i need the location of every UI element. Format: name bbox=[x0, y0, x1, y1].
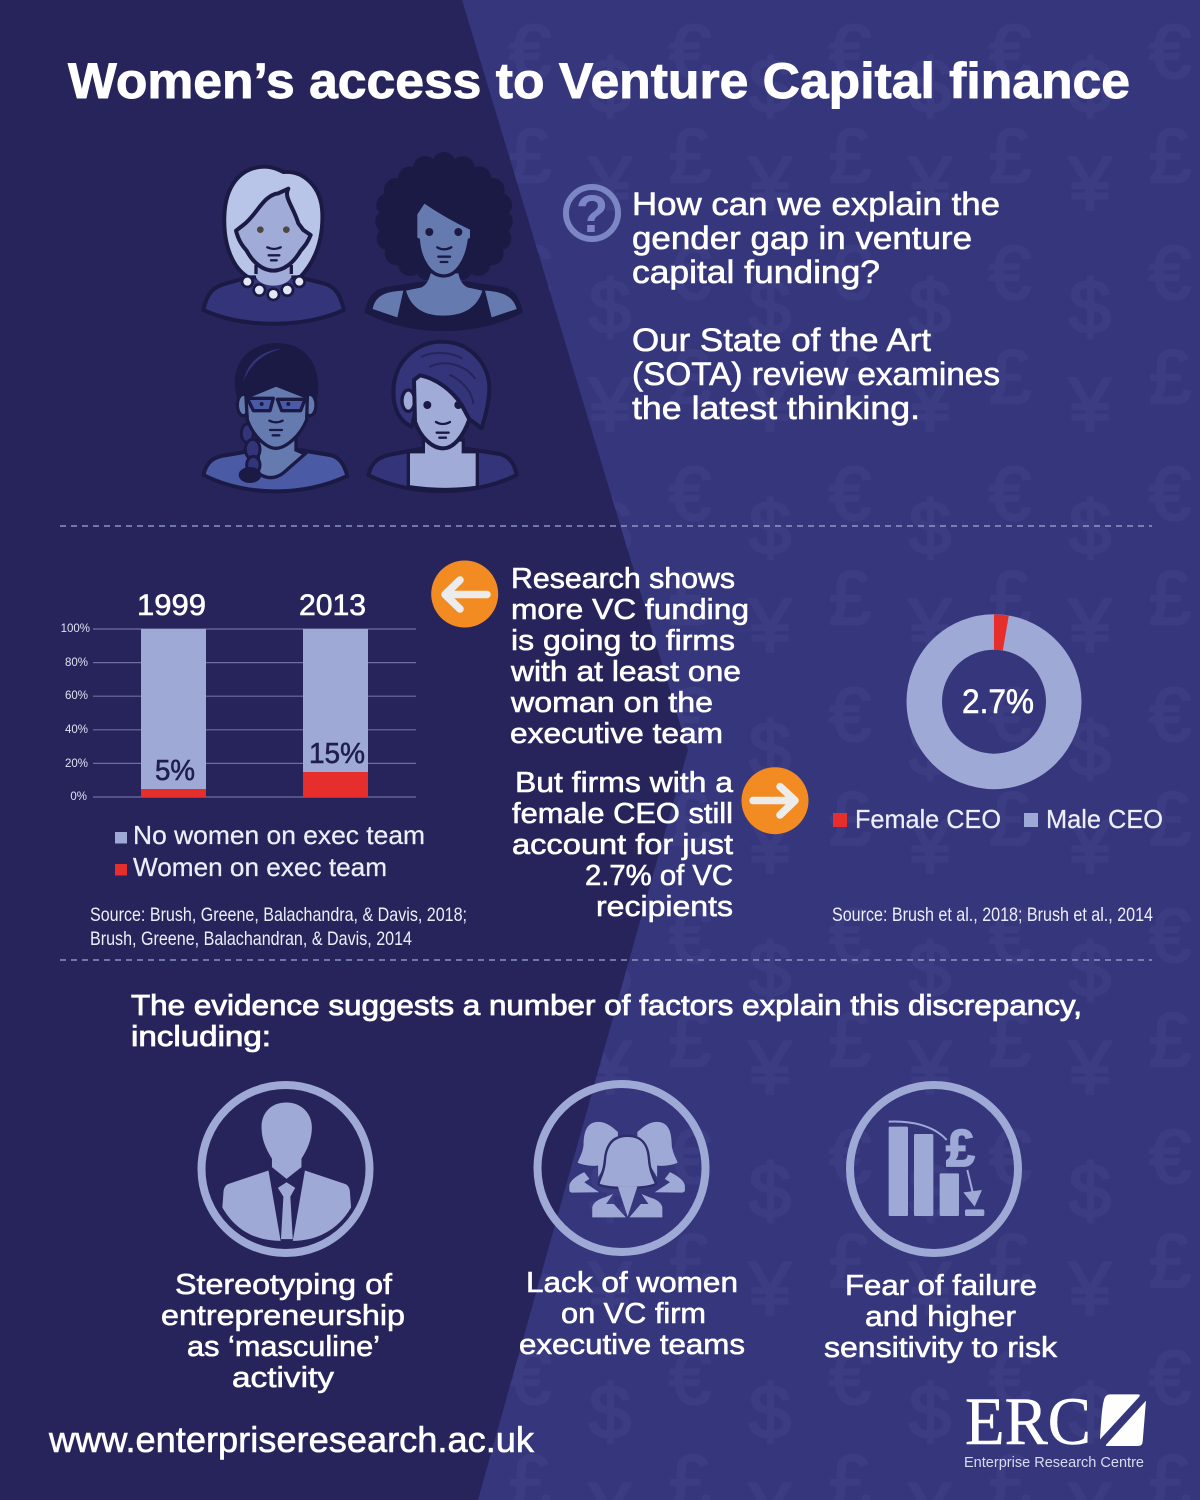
heading: evidence: The evidence suggests a number of factors explain this discrepancy, bbox=[131, 990, 1082, 1022]
text block: research shows: woman on the bbox=[510, 687, 713, 719]
caption: fear of failure: Fear of failure bbox=[845, 1270, 1037, 1302]
caption: lack of women: on VC firm bbox=[561, 1298, 706, 1330]
background: lighter panel with currency pattern bbox=[462, 0, 1200, 1500]
title: Women’s access to Venture Capital finance bbox=[68, 53, 1130, 109]
bar: 1999: 5% bbox=[155, 755, 195, 787]
text block: female CEO: female CEO still bbox=[512, 798, 733, 830]
text block: intro question: How can we explain the bbox=[632, 186, 1000, 222]
icon: group of women bbox=[538, 1084, 706, 1252]
logo: ERC bbox=[964, 1383, 1146, 1471]
icon: question mark: ? bbox=[576, 185, 608, 244]
text block: intro question: capital funding? bbox=[632, 254, 880, 290]
text block: SOTA review bbox=[632, 322, 1000, 426]
text block: female CEO: But firms with a bbox=[515, 767, 734, 799]
caption: stereotyping: Stereotyping of bbox=[175, 1269, 393, 1301]
icon: businessman bbox=[202, 1085, 370, 1253]
caption: fear of failure: sensitivity to risk bbox=[824, 1332, 1058, 1364]
bar chart: women on exec teams 1999 vs 2013 bbox=[61, 589, 416, 803]
bar: 2013: 15% bbox=[309, 738, 365, 770]
bar chart: women on exec teams 1999 vs 2013: 80% bbox=[65, 657, 88, 669]
text block: research shows: executive team bbox=[510, 718, 723, 750]
donut chart: female vs male CEO: 2.7% bbox=[962, 683, 1034, 721]
text block: research shows: more VC funding bbox=[511, 594, 749, 626]
caption: fear of failure bbox=[824, 1270, 1058, 1364]
text block: SOTA review: (SOTA) review examines bbox=[632, 356, 1000, 392]
source: bar chart: Source: Brush, Greene, Balachandra, & Davis, 2018; bbox=[90, 904, 467, 926]
legend: bar chart: Women on exec team bbox=[133, 852, 387, 882]
website url: www.enterpriseresearch.ac.uk bbox=[48, 1419, 535, 1460]
caption: lack of women: Lack of women bbox=[526, 1267, 738, 1299]
icon: falling bars with pound bbox=[850, 1085, 1018, 1253]
caption: lack of women: executive teams bbox=[519, 1329, 745, 1361]
text block: female CEO bbox=[512, 767, 734, 923]
text block: female CEO: 2.7% of VC bbox=[585, 860, 733, 892]
bar chart: women on exec teams 1999 vs 2013: 60% bbox=[65, 690, 88, 702]
legend: donut: Male CEO bbox=[1046, 804, 1163, 834]
legend: bar chart bbox=[115, 820, 425, 882]
caption: fear of failure: and higher bbox=[865, 1301, 1016, 1333]
bar: 1999: 1999 bbox=[137, 589, 206, 622]
caption: stereotyping: entrepreneurship bbox=[161, 1300, 405, 1332]
caption: stereotyping: activity bbox=[232, 1362, 335, 1394]
text block: research shows: is going to firms bbox=[511, 625, 735, 657]
logo: ERC: Enterprise Research Centre bbox=[964, 1455, 1144, 1471]
caption: stereotyping bbox=[161, 1269, 405, 1394]
text block: female CEO: account for just bbox=[512, 829, 733, 861]
avatar: woman with pearl necklace bbox=[203, 167, 344, 324]
legend: bar chart: No women on exec team bbox=[133, 820, 425, 850]
legend: donut bbox=[833, 804, 1163, 834]
caption: lack of women bbox=[519, 1267, 745, 1361]
logo: ERC: ERC bbox=[965, 1383, 1091, 1459]
icon: falling bars with pound: £ bbox=[946, 1119, 975, 1177]
bar: 2013 bbox=[299, 589, 368, 797]
icon: orange left arrow bbox=[431, 560, 498, 628]
icon: question mark bbox=[566, 185, 618, 244]
heading: evidence bbox=[131, 990, 1082, 1053]
avatar: woman with side fringe bbox=[368, 342, 517, 491]
icon: orange right arrow bbox=[742, 767, 808, 834]
legend: donut: Female CEO bbox=[855, 804, 1001, 834]
bar chart: women on exec teams 1999 vs 2013: 100% bbox=[61, 623, 90, 635]
source: bar chart: Brush, Greene, Balachandran, & Davis, 2014 bbox=[90, 928, 412, 950]
bar chart: women on exec teams 1999 vs 2013: 20% bbox=[65, 758, 88, 770]
icon: four women avatars bbox=[203, 152, 521, 491]
avatar: woman with afro bbox=[367, 152, 521, 329]
avatar: woman with glasses and braid bbox=[203, 345, 347, 491]
bar: 2013: 2013 bbox=[299, 589, 366, 622]
text block: research shows bbox=[510, 563, 749, 750]
donut chart: female vs male CEO bbox=[924, 614, 1064, 771]
text block: SOTA review: Our State of the Art bbox=[632, 322, 931, 358]
text block: research shows: Research shows bbox=[511, 563, 735, 595]
text block: research shows: with at least one bbox=[510, 656, 741, 688]
text block: SOTA review: the latest thinking. bbox=[632, 390, 920, 426]
heading: evidence: including: bbox=[131, 1021, 271, 1053]
bar: 1999 bbox=[137, 589, 206, 797]
bar chart: women on exec teams 1999 vs 2013: 0% bbox=[70, 791, 87, 803]
bar chart: women on exec teams 1999 vs 2013: 40% bbox=[65, 724, 88, 736]
text block: intro question: gender gap in venture bbox=[632, 220, 972, 256]
text block: intro question bbox=[632, 186, 1000, 290]
caption: stereotyping: as ‘masculine’ bbox=[187, 1331, 380, 1363]
text block: female CEO: recipients bbox=[596, 891, 733, 923]
source: bar chart bbox=[90, 904, 467, 950]
